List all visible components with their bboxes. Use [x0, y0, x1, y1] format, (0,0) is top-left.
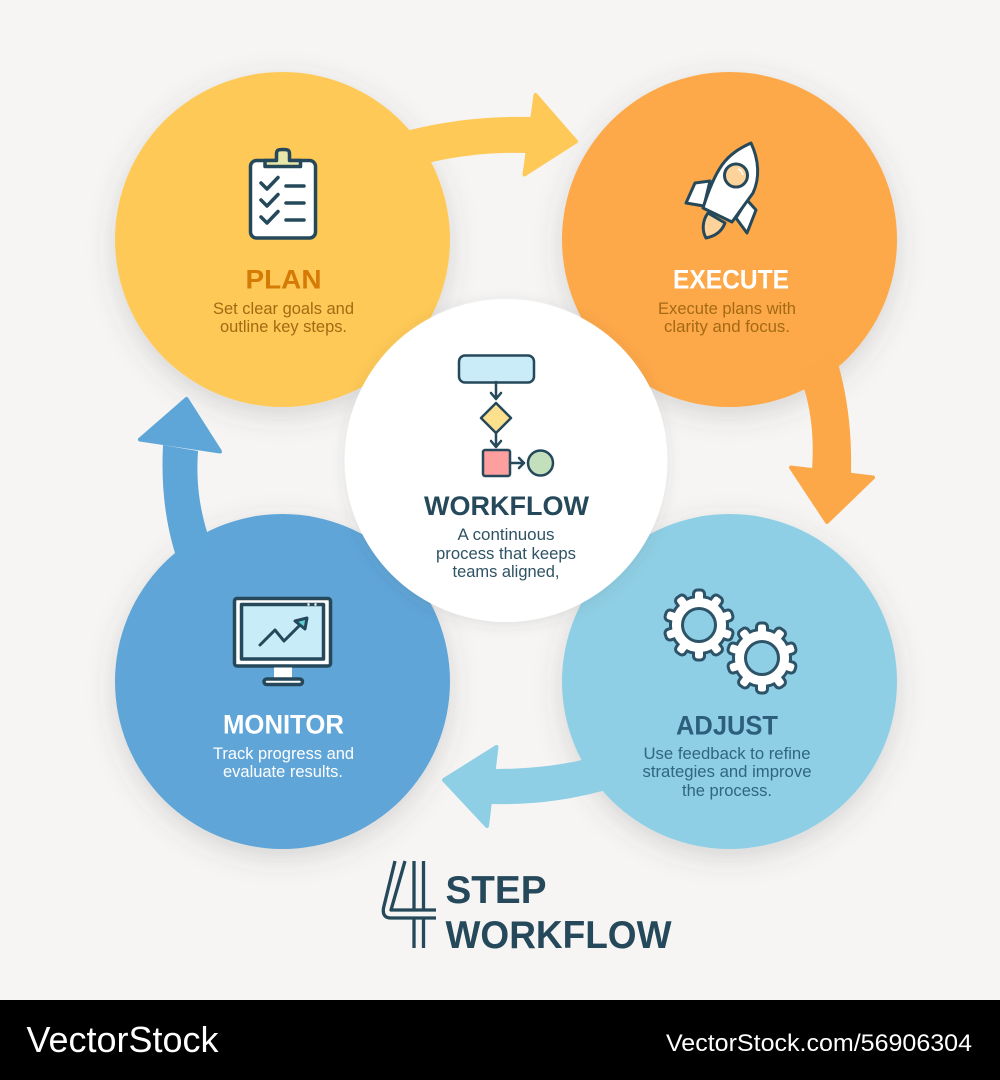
- text: monitor description: Track progress and: [213, 745, 354, 763]
- icon: flowchart: [459, 356, 553, 476]
- text: adjust description: [642, 745, 812, 800]
- heading: step: STEP: [446, 869, 546, 912]
- heading: plan: PLAN: [246, 264, 322, 294]
- text: monitor description: evaluate results.: [223, 763, 343, 781]
- icon: outlined numeral 4: [383, 861, 436, 948]
- text: execute description: clarity and focus.: [664, 318, 790, 336]
- text: adjust description: the process.: [682, 782, 772, 800]
- panel: adjust: [562, 514, 897, 849]
- panel: workflow center: [344, 299, 668, 622]
- panel: plan: [115, 72, 450, 407]
- icon: rocket: [686, 143, 758, 238]
- text: workflow description: [436, 526, 576, 581]
- text: monitor description: [213, 745, 354, 781]
- icon: monitor: [234, 598, 330, 684]
- icon: gears: [664, 590, 797, 693]
- text: execute description: Execute plans with: [658, 300, 796, 318]
- text: plan description: Set clear goals and: [213, 300, 354, 318]
- heading: workflow: WORKFLOW: [424, 491, 590, 521]
- arrow: execute to adjust: [791, 352, 873, 522]
- text: workflow description: process that keeps: [436, 545, 576, 563]
- text: execute description: [658, 300, 796, 336]
- text: workflow description: teams aligned,: [452, 563, 560, 581]
- heading: monitor: MONITOR: [223, 710, 344, 740]
- text: workflow description: A continuous: [458, 526, 554, 544]
- footer logo: VectorStock: [26, 1019, 219, 1060]
- panel: monitor: [115, 514, 450, 849]
- heading: execute: EXECUTE: [673, 264, 789, 294]
- icon: clipboard: [250, 150, 316, 238]
- text: plan description: outline key steps.: [220, 318, 347, 336]
- arrow: adjust to monitor: [444, 747, 615, 826]
- footer url: VectorStock.com/56906304: [666, 1030, 972, 1057]
- heading: workflow: WORKFLOW: [446, 914, 672, 957]
- text: adjust description: Use feedback to refine: [644, 745, 810, 763]
- text: plan description: [213, 300, 354, 336]
- panel: execute: [562, 72, 897, 407]
- heading: adjust: ADJUST: [676, 710, 778, 740]
- footer bar: [0, 1000, 1000, 1080]
- text: adjust description: strategies and improve: [642, 763, 812, 781]
- arrow: plan to execute: [395, 95, 576, 174]
- arrow: monitor to plan: [140, 399, 220, 565]
- title: 4 step workflow: [383, 861, 672, 957]
